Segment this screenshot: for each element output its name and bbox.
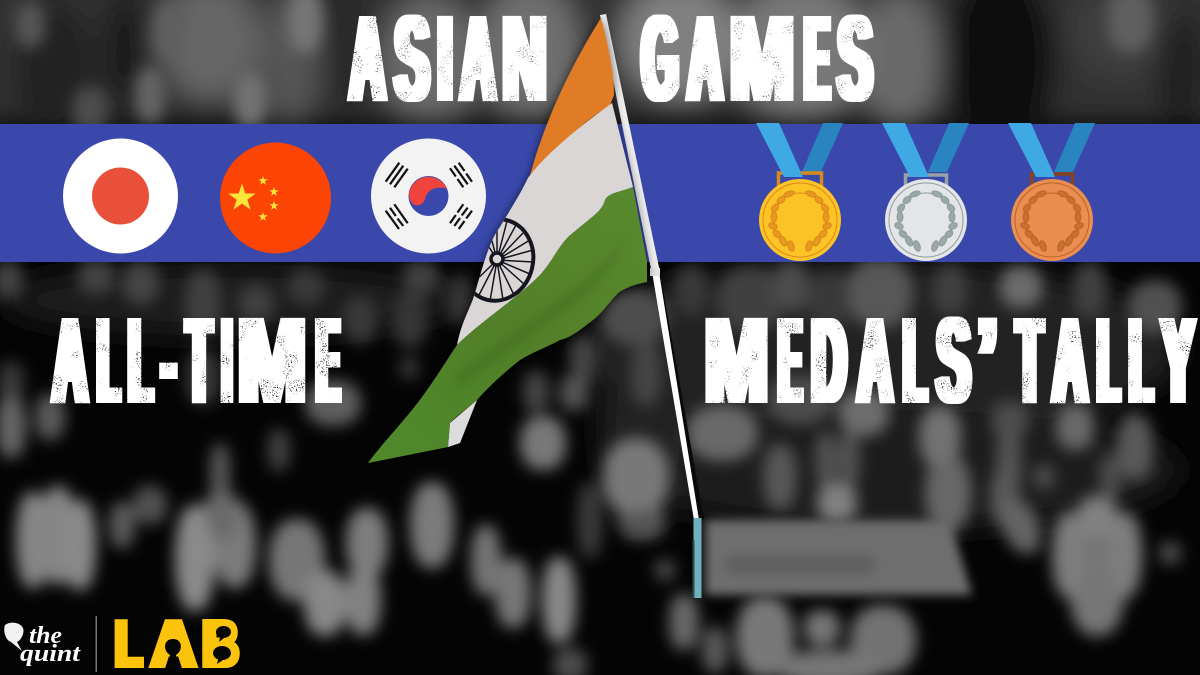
heading: MEDALS' TALLY: M bbox=[705, 292, 768, 428]
heading: ALL-TIME: I bbox=[223, 292, 231, 428]
logo: LAB bbox=[115, 607, 238, 675]
heading: MEDALS' TALLY bbox=[705, 292, 1194, 428]
silver medal bbox=[882, 123, 969, 261]
banner held by the crowd bbox=[705, 520, 972, 595]
gold medal bbox=[756, 123, 843, 261]
heading: MEDALS' TALLY: E bbox=[779, 292, 801, 428]
Indian flag on pole bbox=[368, 14, 704, 598]
heading: MEDALS' TALLY: S bbox=[937, 292, 970, 428]
heading: ALL-TIME: L bbox=[129, 292, 152, 428]
icon: speech bubble bbox=[4, 623, 23, 651]
heading: ALL-TIME: T bbox=[187, 292, 211, 428]
text: E bbox=[317, 292, 339, 428]
heading: MEDALS' TALLY: ’ bbox=[978, 292, 994, 428]
heading: ALL-TIME: L bbox=[98, 292, 119, 428]
flag of Japan bbox=[63, 138, 178, 254]
logo: The Quint bbox=[4, 623, 82, 667]
bronze medal bbox=[1008, 123, 1095, 261]
icon: keyhole bulb in A bbox=[165, 639, 181, 668]
heading: MEDALS' TALLY: L bbox=[1098, 292, 1119, 428]
heading: ALL-TIME: M bbox=[238, 292, 306, 428]
Ashoka Chakra bbox=[474, 218, 536, 303]
heading: MEDALS' TALLY: D bbox=[812, 292, 846, 428]
right crowd bbox=[604, 292, 664, 342]
heading: ALL-TIME bbox=[53, 292, 339, 428]
heading: GAMES bbox=[642, 0, 872, 126]
logo: The Quint: quint bbox=[20, 641, 82, 667]
flag pole bbox=[600, 14, 704, 598]
flag cloth bbox=[368, 18, 647, 463]
heading: MEDALS' TALLY: A bbox=[858, 292, 892, 428]
lower left crowd bbox=[19, 495, 47, 585]
heading: ALL-TIME: - bbox=[162, 292, 175, 428]
heading: MEDALS' TALLY: T bbox=[1017, 292, 1042, 428]
icon: chat bubbles in B bbox=[216, 626, 231, 642]
heading: ASIAN bbox=[350, 0, 546, 126]
heading: MEDALS' TALLY: A bbox=[1053, 292, 1087, 428]
flag of South Korea bbox=[371, 138, 486, 254]
flag of China bbox=[220, 142, 331, 254]
heading: MEDALS' TALLY: L bbox=[904, 292, 926, 428]
heading: ALL-TIME: A bbox=[53, 292, 87, 428]
logo divider bbox=[96, 616, 97, 672]
blue band bbox=[0, 124, 1200, 262]
upper left crowd bbox=[0, 264, 20, 296]
logo: The Quint: the bbox=[29, 623, 62, 649]
